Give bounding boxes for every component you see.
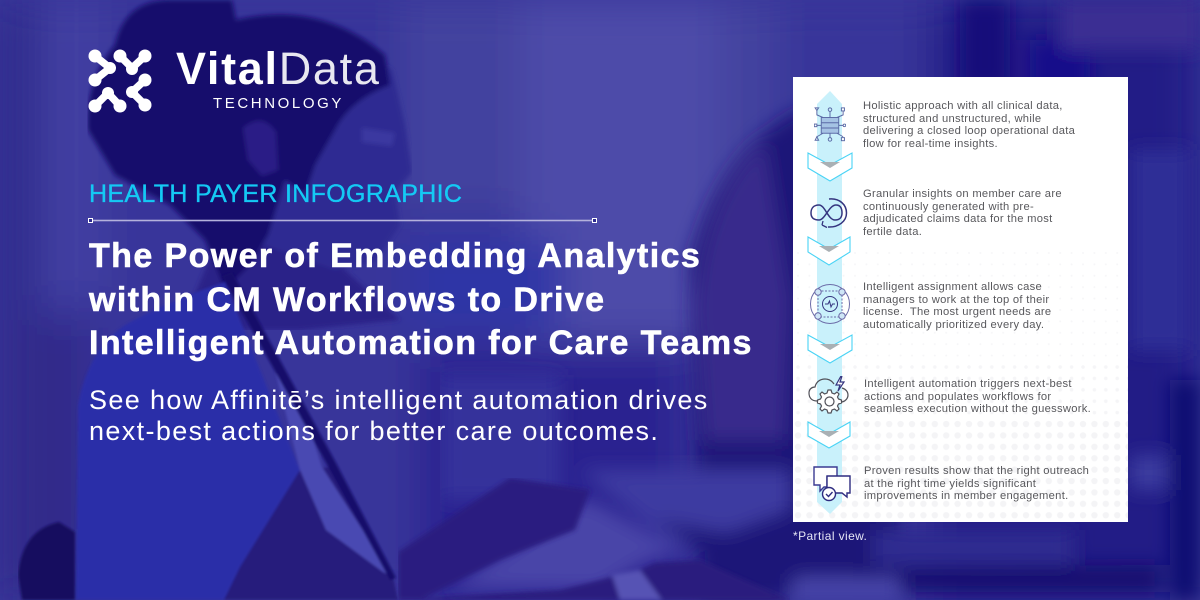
arrow: vertical flow (807, 91, 853, 514)
logo wordmark: VitalData (176, 43, 381, 94)
divider line (88, 218, 597, 223)
text block 4 (864, 378, 1091, 415)
text block 3: license. The most urgent needs are (863, 306, 1051, 318)
woman: face, neck and hair (88, 0, 412, 330)
main title: The Power of Embedding Analytics (89, 237, 701, 275)
text block 1: structured and unstructured, while (863, 113, 1041, 125)
icon: cloud gear (808, 376, 849, 414)
icon: data server (814, 107, 846, 142)
subtitle: See how Affinitē’s intelligent automation drives (89, 385, 709, 415)
text block 1 (863, 100, 1075, 150)
text block 3: managers to work at the top of their (863, 294, 1049, 306)
text block 1: Holistic approach with all clinical data, (863, 100, 1063, 112)
text block 5 (864, 465, 1089, 502)
text block 5: Proven results show that the right outreach (864, 465, 1089, 477)
text block 4: Intelligent automation triggers next-best (864, 378, 1072, 390)
text block 2: continuously generated with pre- (863, 201, 1034, 213)
arms and hands (398, 478, 790, 600)
text block 2 (863, 188, 1062, 238)
text block 1: delivering a closed loop operational data (863, 125, 1075, 137)
main title: Intelligent Automation for Care Teams (89, 324, 753, 362)
icon: infinity loop (810, 198, 848, 228)
nurse uniform (18, 272, 398, 600)
icon: chat bubbles check (813, 466, 851, 502)
icon: assignment circle (810, 284, 850, 324)
text block 4: seamless execution without the guesswork. (864, 403, 1091, 415)
chevrons (808, 153, 852, 448)
text block 4: actions and populates workflows for (864, 391, 1051, 403)
subtitle: next-best actions for better care outcomes. (89, 416, 659, 446)
text block 1: flow for real-time insights. (863, 138, 998, 150)
text block 2: Granular insights on member care are (863, 188, 1062, 200)
icon: logo mark (88, 50, 152, 112)
text block 5: improvements in member engagement. (864, 490, 1068, 502)
main title: within CM Workflows to Drive (89, 280, 605, 318)
subtitle (89, 385, 709, 446)
panel: infographic preview (793, 77, 1128, 522)
logo (88, 43, 381, 112)
text block 3: automatically prioritized every day. (863, 319, 1044, 331)
logo subtitle: TECHNOLOGY (213, 95, 344, 112)
text block 3: Intelligent assignment allows case (863, 281, 1042, 293)
dot pattern (795, 252, 1128, 518)
main title (88, 237, 753, 362)
text block 2: adjudicated claims data for the most (863, 213, 1053, 225)
eyebrow heading: HEALTH PAYER INFOGRAPHIC (89, 180, 462, 208)
footnote: *Partial view. (793, 529, 867, 543)
text block 5: at the right time yields significant (864, 478, 1036, 490)
text block 3 (863, 281, 1051, 331)
text block 2: fertile data. (863, 226, 922, 238)
